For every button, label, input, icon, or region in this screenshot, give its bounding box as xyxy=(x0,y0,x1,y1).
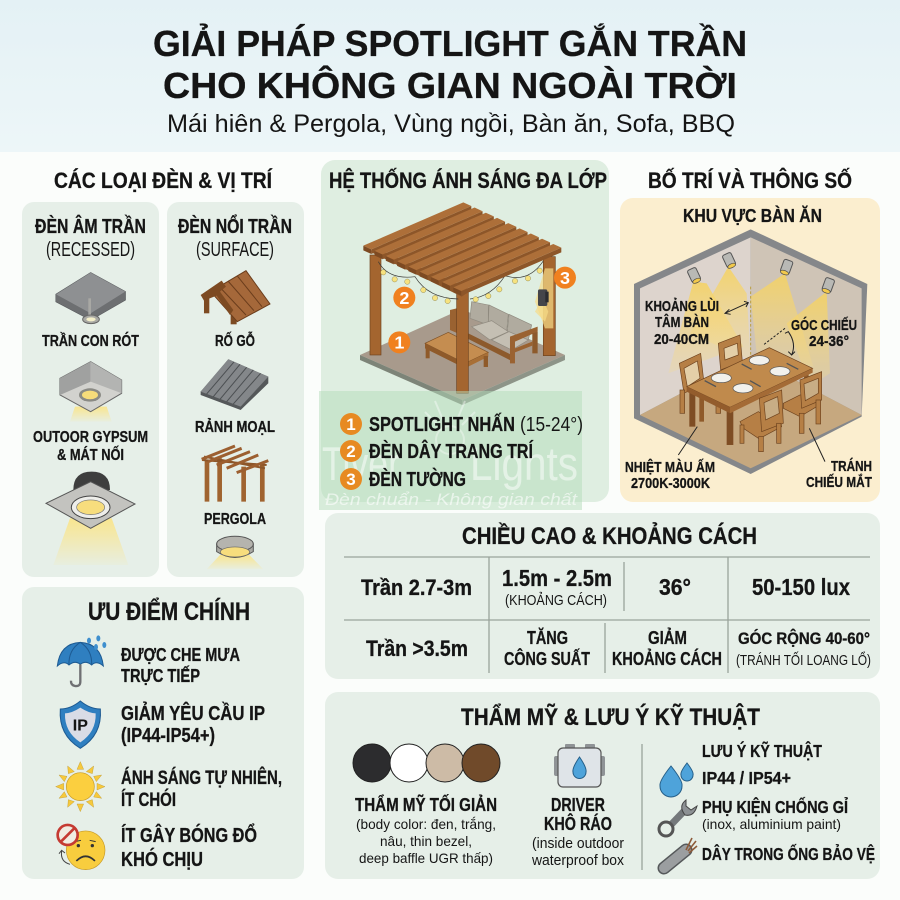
label: beam angle: 24-36° xyxy=(809,333,849,350)
label: wood joists: RỐ GỖ xyxy=(215,330,255,350)
heading: advantages: ƯU ĐIỂM CHÍNH xyxy=(88,597,250,626)
label: poured ceiling: TRẦN CON RÓT xyxy=(42,331,139,350)
title: CHO KHÔNG GIAN NGOÀI TRỜI xyxy=(163,64,737,106)
table row: ceiling above 3.5m: (TRÁNH TỐI LOANG LỔ) xyxy=(736,651,871,669)
table row: ceiling above 3.5m: TĂNG xyxy=(527,627,568,648)
spotlights xyxy=(687,252,835,294)
table row: ceiling 2.7-3m: 36° xyxy=(659,574,691,600)
text: natural light xyxy=(121,767,282,811)
table row: ceiling above 3.5m: GÓC RỘNG 40-60° xyxy=(738,629,870,648)
icon: concrete ceiling xyxy=(56,273,125,324)
icon: umbrella and rain xyxy=(57,635,106,686)
heading: layered lighting: HỆ THỐNG ÁNH SÁNG ĐA LỚP xyxy=(329,167,607,193)
legend: lighting layers: 1 xyxy=(346,415,356,434)
label: colour temperature xyxy=(625,458,715,492)
text: dry driver xyxy=(531,795,625,869)
number badge 1 xyxy=(388,331,410,353)
text: less shadow xyxy=(121,823,257,871)
legend: lighting layers: (15-24°) xyxy=(520,414,583,436)
title xyxy=(153,22,747,106)
colour swatches xyxy=(353,744,500,782)
label: beam angle xyxy=(791,316,857,350)
text: less shadow: KHÓ CHỊU xyxy=(121,847,203,871)
text: minimal aesthetics: nâu, thin bezel, xyxy=(380,833,472,849)
back chairs xyxy=(679,335,742,413)
dining table xyxy=(687,348,813,445)
text: minimal aesthetics: THẨM MỸ TỐI GIẢN xyxy=(355,794,497,815)
watermark: Đèn chuẩn - Không gian chất xyxy=(325,490,578,509)
text: less shadow: ÍT GÂY BÓNG ĐỔ xyxy=(121,823,257,847)
heading: layout and specs: BỐ TRÍ VÀ THÔNG SỐ xyxy=(648,167,852,193)
text: rain cover xyxy=(121,645,240,686)
legend: lighting layers: ĐÈN DÂY TRANG TRÍ xyxy=(369,439,533,463)
roof slats xyxy=(363,202,561,297)
coffee table xyxy=(425,332,488,380)
panel: layered lighting system xyxy=(321,160,609,502)
icon: gypsum recess xyxy=(60,362,122,422)
watermark xyxy=(319,391,582,510)
text: rain cover: ĐƯỢC CHE MƯA xyxy=(121,645,240,665)
icon: unhappy face with prohibition sign xyxy=(58,825,105,870)
section: layout and specs xyxy=(620,167,880,502)
label: colour temperature: NHIỆT MÀU ẤM xyxy=(625,458,715,476)
text: dry driver: waterproof box xyxy=(531,853,625,869)
wall lamp xyxy=(535,289,549,322)
panel: recessed: (RECESSED) xyxy=(46,239,135,261)
legend: lighting layers: SPOTLIGHT NHẤN xyxy=(369,413,515,436)
text: dry driver: KHÔ RÁO xyxy=(544,813,612,834)
illustration: pergola scene xyxy=(360,202,576,405)
icon: surface lamp xyxy=(207,536,263,569)
title: GIẢI PHÁP SPOTLIGHT GẮN TRẦN xyxy=(153,22,747,64)
panel: key advantages xyxy=(22,587,304,879)
icon: cable in conduit xyxy=(664,838,697,868)
heading: light types: CÁC LOẠI ĐÈN & VỊ TRÍ xyxy=(54,168,273,193)
label: avoid eye glare: CHIẾU MẮT xyxy=(806,473,872,491)
table row: ceiling 2.7-3m xyxy=(361,565,850,609)
text: natural light: ÍT CHÓI xyxy=(121,789,176,811)
label: outdoor gypsum xyxy=(33,429,148,464)
number badge 2: 2 xyxy=(399,288,409,308)
string lights xyxy=(378,261,543,304)
panel: surface mounted: (SURFACE) xyxy=(196,239,274,261)
text: reduced IP xyxy=(121,701,265,747)
text: minimal aesthetics xyxy=(355,794,497,866)
section: light types and positions xyxy=(22,168,304,577)
label: grooves: RẢNH MOẠL xyxy=(195,417,275,436)
text: technical notes heading: LƯU Ý KỸ THUẬT xyxy=(702,740,822,761)
text: reduced IP: GIẢM YÊU CẦU IP xyxy=(121,701,265,725)
text: natural light: ÁNH SÁNG TỰ NHIÊN, xyxy=(121,767,282,789)
header band xyxy=(0,0,900,152)
subtitle: Mái hiên & Pergola, Vùng ngồi, Bàn ăn, Sofa, BBQ xyxy=(167,110,735,138)
number badge 3: 3 xyxy=(560,268,570,288)
panel: dining area xyxy=(620,198,880,502)
label: beam angle: GÓC CHIẾU xyxy=(791,316,857,334)
icon: waterproof driver box xyxy=(554,744,605,787)
table row: ceiling above 3.5m: Trần >3.5m xyxy=(366,636,468,661)
front chairs xyxy=(740,372,822,452)
setback arrows and guides xyxy=(725,287,795,357)
panel: aesthetics and technical notes xyxy=(325,692,880,879)
legend: lighting layers: ĐÈN TƯỜNG xyxy=(369,467,466,491)
heading: height and spacing: CHIỀU CAO & KHOẢNG CÁCH xyxy=(462,521,757,550)
label: colour temperature: 2700K-3000K xyxy=(631,475,710,492)
text: rain cover: TRỰC TIẾP xyxy=(121,665,200,686)
icon: wrench xyxy=(659,800,697,836)
illustration: dining room xyxy=(634,229,867,474)
text: rustproof accessories: PHỤ KIỆN CHỐNG GỈ xyxy=(702,796,848,817)
number badge 1: 1 xyxy=(394,333,404,353)
panel: height and spacing xyxy=(325,513,880,679)
icon: IP shield xyxy=(60,701,100,748)
label: setback: 20-40CM xyxy=(654,331,709,348)
icon: IP shield: IP xyxy=(73,717,88,734)
text: reduced IP: (IP44-IP54+) xyxy=(121,725,215,747)
text: minimal aesthetics: (body color: đen, trắng, xyxy=(356,816,496,832)
label: setback xyxy=(645,297,719,348)
icon: wooden eaves xyxy=(201,271,270,324)
sofa xyxy=(450,302,538,363)
table row: ceiling above 3.5m xyxy=(366,627,871,669)
label: avoid eye glare: TRÁNH xyxy=(831,458,872,475)
label: setback: KHOẢNG LÙI xyxy=(645,297,719,315)
text: rustproof accessories: (inox, aluminium paint) xyxy=(702,816,841,832)
table row: ceiling above 3.5m: KHOẢNG CÁCH xyxy=(612,648,722,669)
watermark: Tiver xyxy=(322,437,400,490)
heading: dining area: KHU VỰC BÀN ĂN xyxy=(683,205,822,226)
panel: recessed xyxy=(22,202,159,577)
text: rustproof accessories xyxy=(702,796,848,832)
panel: recessed: ĐÈN ÂM TRẦN xyxy=(35,214,146,238)
label: outdoor gypsum: & MÁT NỐI xyxy=(57,444,124,464)
label: setback: TÂM BÀN xyxy=(655,313,709,331)
watermark: Lights xyxy=(470,437,578,490)
label: outdoor gypsum: OUTOOR GYPSUM xyxy=(33,429,148,446)
table row: ceiling 2.7-3m: (KHOẢNG CÁCH) xyxy=(505,592,607,609)
pointer lines xyxy=(678,427,825,462)
table row: ceiling 2.7-3m: 1.5m - 2.5m xyxy=(502,565,612,591)
label: pergola: PERGOLA xyxy=(204,511,266,528)
table row: ceiling 2.7-3m: Trần 2.7-3m xyxy=(361,575,472,600)
text: minimal aesthetics: deep baffle UGR thấp) xyxy=(359,850,493,866)
text: dry driver: DRIVER xyxy=(551,795,605,815)
label: avoid eye glare xyxy=(806,458,872,491)
number badge 2 xyxy=(393,287,415,309)
panel: surface mounted xyxy=(167,202,304,577)
text: dry driver: (inside outdoor xyxy=(532,836,624,852)
panel: surface mounted: ĐÈN NỔI TRẦN xyxy=(178,214,292,238)
table row: ceiling above 3.5m: GIẢM xyxy=(648,627,687,648)
legend: lighting layers: 3 xyxy=(346,470,356,489)
light beams xyxy=(668,267,830,387)
number badge 3 xyxy=(554,267,576,289)
icon: corrugated deck xyxy=(201,359,268,410)
legend: lighting layers: 2 xyxy=(346,442,356,461)
legend: lighting layers xyxy=(340,413,583,491)
table row: ceiling 2.7-3m: 50-150 lux xyxy=(752,574,850,600)
icon: small pergola xyxy=(202,446,268,502)
table row: ceiling above 3.5m: CÔNG SUẤT xyxy=(504,648,590,669)
icon: sun xyxy=(56,762,105,812)
icon: water drops xyxy=(660,763,693,797)
heading: aesthetics: THẨM MỸ & LƯU Ý KỸ THUẬT xyxy=(461,703,760,731)
text: IP rating: IP44 / IP54+ xyxy=(702,768,791,788)
icon: recessed downlight with beam xyxy=(46,472,135,565)
